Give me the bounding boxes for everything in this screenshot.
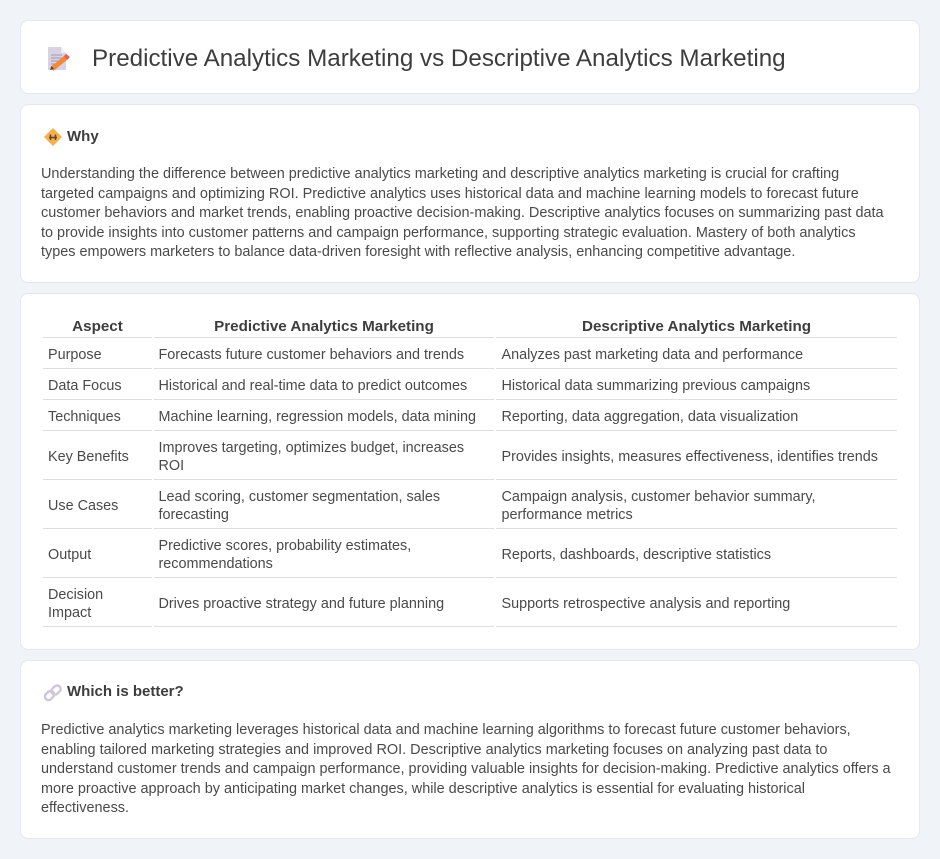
heading: which is better: Which is better?: [67, 683, 184, 700]
row: key benefits: Improves targeting, optimizes budget, increases: [158, 440, 464, 456]
icon: warning diamond: [44, 128, 62, 146]
text block: why paragraph: Understanding the difference between predictive analytics marketing and descriptive analytics marketing is crucial for crafting: [41, 166, 839, 182]
row: data focus: Historical data summarizing previous campaigns: [502, 378, 810, 394]
row: decision impact: [48, 587, 790, 621]
row: purpose: Forecasts future customer behaviors and trends: [158, 347, 464, 363]
row: use cases: Lead scoring, customer segmentation, sales: [158, 489, 440, 505]
panel: which is better: [20, 660, 920, 839]
row: techniques: Techniques: [48, 409, 121, 425]
text block: why paragraph: [41, 166, 884, 260]
row: output: Output: [48, 547, 91, 563]
text block: why paragraph: to provide insights into customer patterns and campaign performance, supporting strategic evaluation. Mastery of both analytics: [41, 224, 856, 240]
icon: chain link: [44, 684, 62, 702]
row: purpose: [48, 347, 803, 363]
heading: why: Why: [67, 128, 99, 144]
row: key benefits: Provides insights, measures effectiveness, identifies trends: [502, 449, 878, 465]
panel: why: [20, 104, 920, 283]
row: key benefits: Key Benefits: [48, 449, 129, 465]
text block: which is better paragraph: enabling tailored marketing strategies and improved ROI. Descriptive analytics marketing focuses on analyzing past data to: [41, 742, 827, 758]
table header: [72, 318, 811, 335]
row: decision impact: Decision: [48, 587, 103, 603]
row: purpose: Purpose: [48, 347, 102, 363]
text block: which is better paragraph: effectiveness.: [41, 800, 129, 816]
text block: why paragraph: types empowers marketers to balance data-driven foresight with reflective analysis, enhancing competitive advantage.: [41, 244, 795, 260]
text block: why paragraph: customer behaviors and market trends, enabling proactive decision-making. Descriptive analytics focuses on summarizing past data: [41, 205, 884, 221]
row: output: recommendations: [158, 556, 273, 572]
row: data focus: [48, 378, 810, 394]
row: output: Predictive scores, probability estimates,: [158, 538, 411, 554]
row: techniques: Reporting, data aggregation, data visualization: [502, 409, 798, 425]
row: use cases: performance metrics: [502, 507, 633, 523]
table header: Descriptive Analytics Marketing: [582, 318, 811, 335]
text block: which is better paragraph: Predictive analytics marketing leverages historical data and machine learning algorithms to forecast future customer behaviors,: [41, 722, 851, 738]
icon: document with pencil: [48, 47, 70, 71]
row: use cases: Use Cases: [48, 498, 118, 514]
table header: Predictive Analytics Marketing: [214, 318, 434, 335]
row: key benefits: [48, 440, 878, 474]
text block: which is better paragraph: more proactive approach by anticipating market changes, while descriptive analytics is essential for evaluating historical: [41, 780, 805, 796]
row: techniques: [48, 409, 798, 425]
row: output: Reports, dashboards, descriptive statistics: [502, 547, 771, 563]
row: key benefits: ROI: [158, 458, 184, 474]
row: data focus: Historical and real-time data to predict outcomes: [158, 378, 467, 394]
table header: Aspect: [72, 318, 123, 335]
row: use cases: Campaign analysis, customer behavior summary,: [502, 489, 816, 505]
panel: comparison table: [20, 293, 920, 650]
row: use cases: forecasting: [158, 507, 229, 523]
row: decision impact: Drives proactive strategy and future planning: [158, 596, 444, 612]
row: decision impact: Supports retrospective analysis and reporting: [502, 596, 790, 612]
row: use cases: [48, 489, 816, 523]
title: Predictive Analytics Marketing vs Descriptive Analytics Marketing: [92, 45, 786, 72]
row: output: [48, 538, 771, 572]
text block: why paragraph: targeted campaigns and optimizing ROI. Predictive analytics uses historical data and machine learning models to forecast future: [41, 186, 859, 202]
panel: title card: [20, 20, 920, 94]
row: decision impact: Impact: [48, 605, 91, 621]
row: purpose: Analyzes past marketing data and performance: [502, 347, 803, 363]
row: data focus: Data Focus: [48, 378, 122, 394]
text block: which is better paragraph: [41, 722, 891, 816]
row: techniques: Machine learning, regression models, data mining: [158, 409, 476, 425]
text block: which is better paragraph: understand customer trends and campaign performance, providing valuable insights for decision-making. Predictive analytics offers a: [41, 761, 891, 777]
